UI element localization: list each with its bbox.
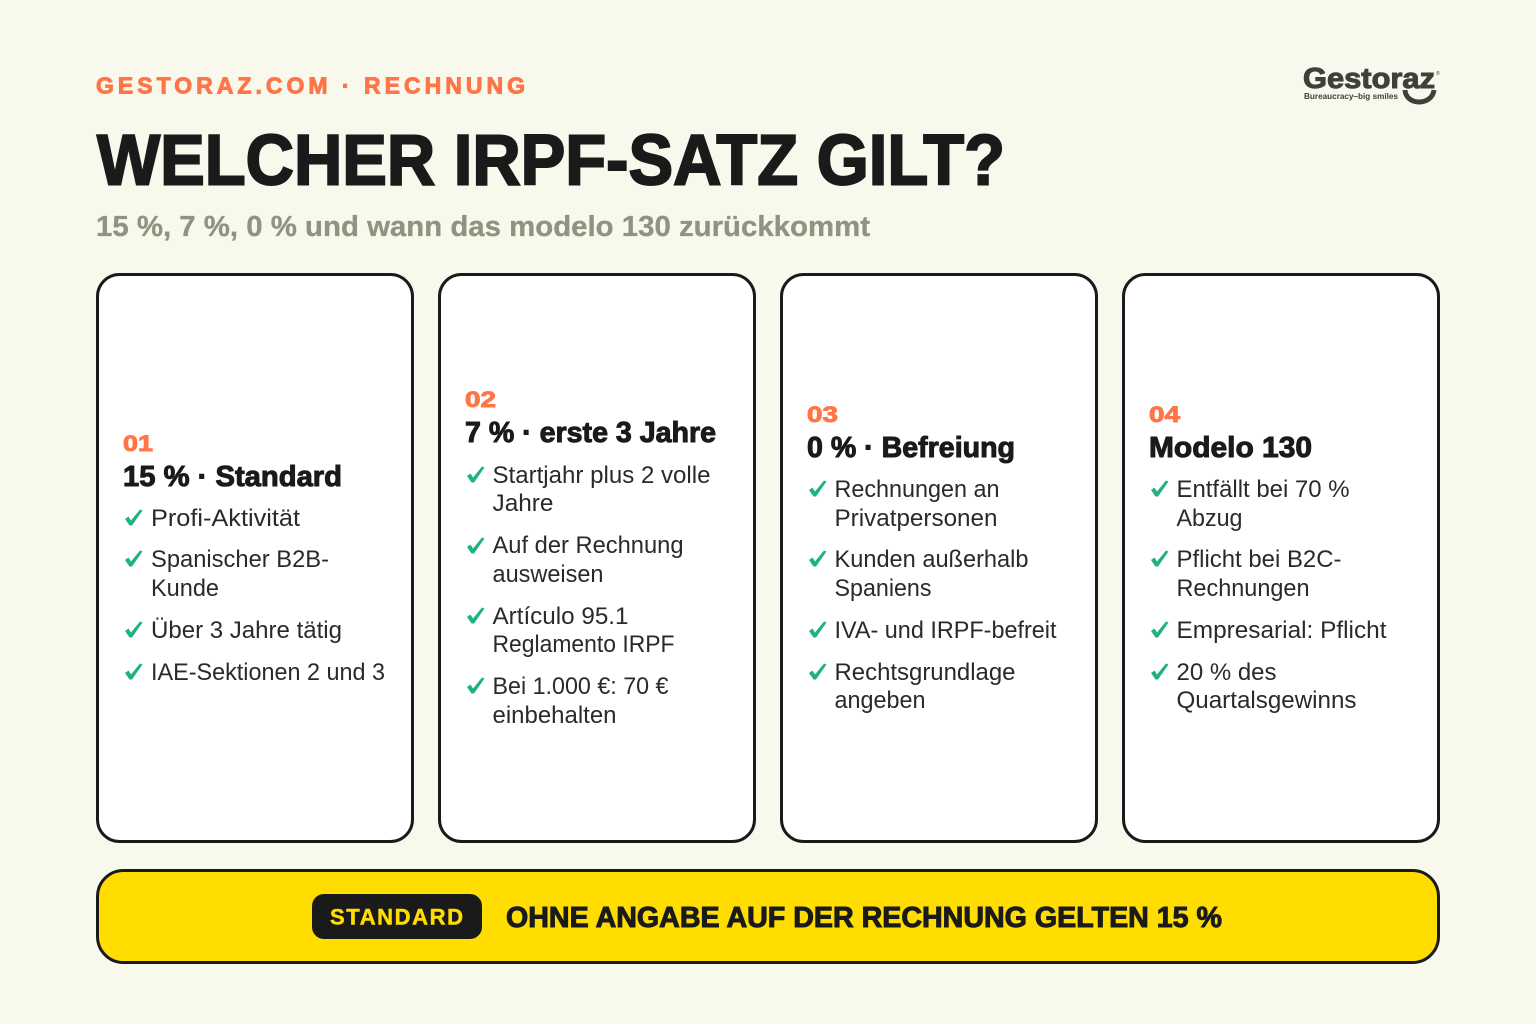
list item: Jahre [492,490,554,517]
list item [467,603,674,658]
card number: 01 [123,431,153,456]
list item: Artículo 95.1 [492,603,628,630]
card heading: 0 % · Befreiung [807,432,1015,464]
list item: Reglamento IRPF [492,631,674,658]
card number: 04 [1149,402,1181,427]
list item: Kunde [151,575,219,602]
list item [1151,659,1356,714]
list item: Empresarial: Pflicht [1176,617,1387,644]
list item: Spanischer B2B- [151,546,329,573]
logo: ® [1436,70,1440,77]
list item: Rechtsgrundlage [834,659,1016,686]
list item: angeben [834,687,926,714]
list item: Quartalsgewinns [1176,687,1356,714]
logo: Bureaucracy–big smiles [1304,92,1399,101]
list item [809,476,1000,532]
list item: Über 3 Jahre tätig [151,617,342,644]
card heading: Modelo 130 [1149,432,1312,464]
list item [467,673,669,729]
list item: Profi-Aktivität [151,505,300,532]
badge: standard [312,894,482,939]
card heading: 7 % · erste 3 Jahre [465,417,716,449]
list item [467,462,710,517]
list item: Pflicht bei B2C- [1176,546,1342,573]
list item [467,532,684,588]
list item [1151,476,1350,532]
subtitle: 15 %, 7 %, 0 % und wann das modelo 130 zurückkommt [96,211,871,243]
card number: 03 [807,402,838,427]
list item: Abzug [1176,505,1242,532]
list item: Rechnungen an [834,476,1000,503]
list item: Spaniens [834,575,932,602]
panel: 7 % erste 3 Jahre [440,274,754,842]
banner message: OHNE ANGABE AUF DER RECHNUNG GELTEN 15 % [506,902,1222,934]
logo: Gestoraz [1303,63,1435,95]
callout banner [98,870,1438,962]
list item: Auf der Rechnung [492,532,684,559]
list item: 20 % des [1176,659,1276,686]
list item [809,659,1016,714]
list item: Startjahr plus 2 volle [492,462,710,489]
panel: Modelo 130 [1124,274,1438,842]
list item: IVA- und IRPF-befreit [834,617,1057,644]
list item: Entfällt bei 70 % [1176,476,1350,503]
list item: Privatpersonen [834,505,998,532]
list item [125,546,329,602]
list item: Kunden außerhalb [834,546,1028,573]
card heading: 15 % · Standard [123,461,342,493]
list item [809,546,1028,602]
list item [1151,546,1342,602]
panel: 0 % Befreiung [782,274,1096,842]
badge: standard: STANDARD [330,904,463,930]
title: WELCHER IRPF-SATZ GILT? [97,122,1005,200]
list item: Rechnungen [1176,575,1310,602]
eyebrow: GESTORAZ.COM · RECHNUNG [96,72,525,98]
list item: ausweisen [492,561,604,588]
list item: IAE-Sektionen 2 und 3 [151,659,385,686]
panel: 15 % Standard [98,274,412,842]
list item: Bei 1.000 €: 70 € [492,673,669,700]
list item: einbehalten [492,702,616,729]
card number: 02 [465,387,496,412]
